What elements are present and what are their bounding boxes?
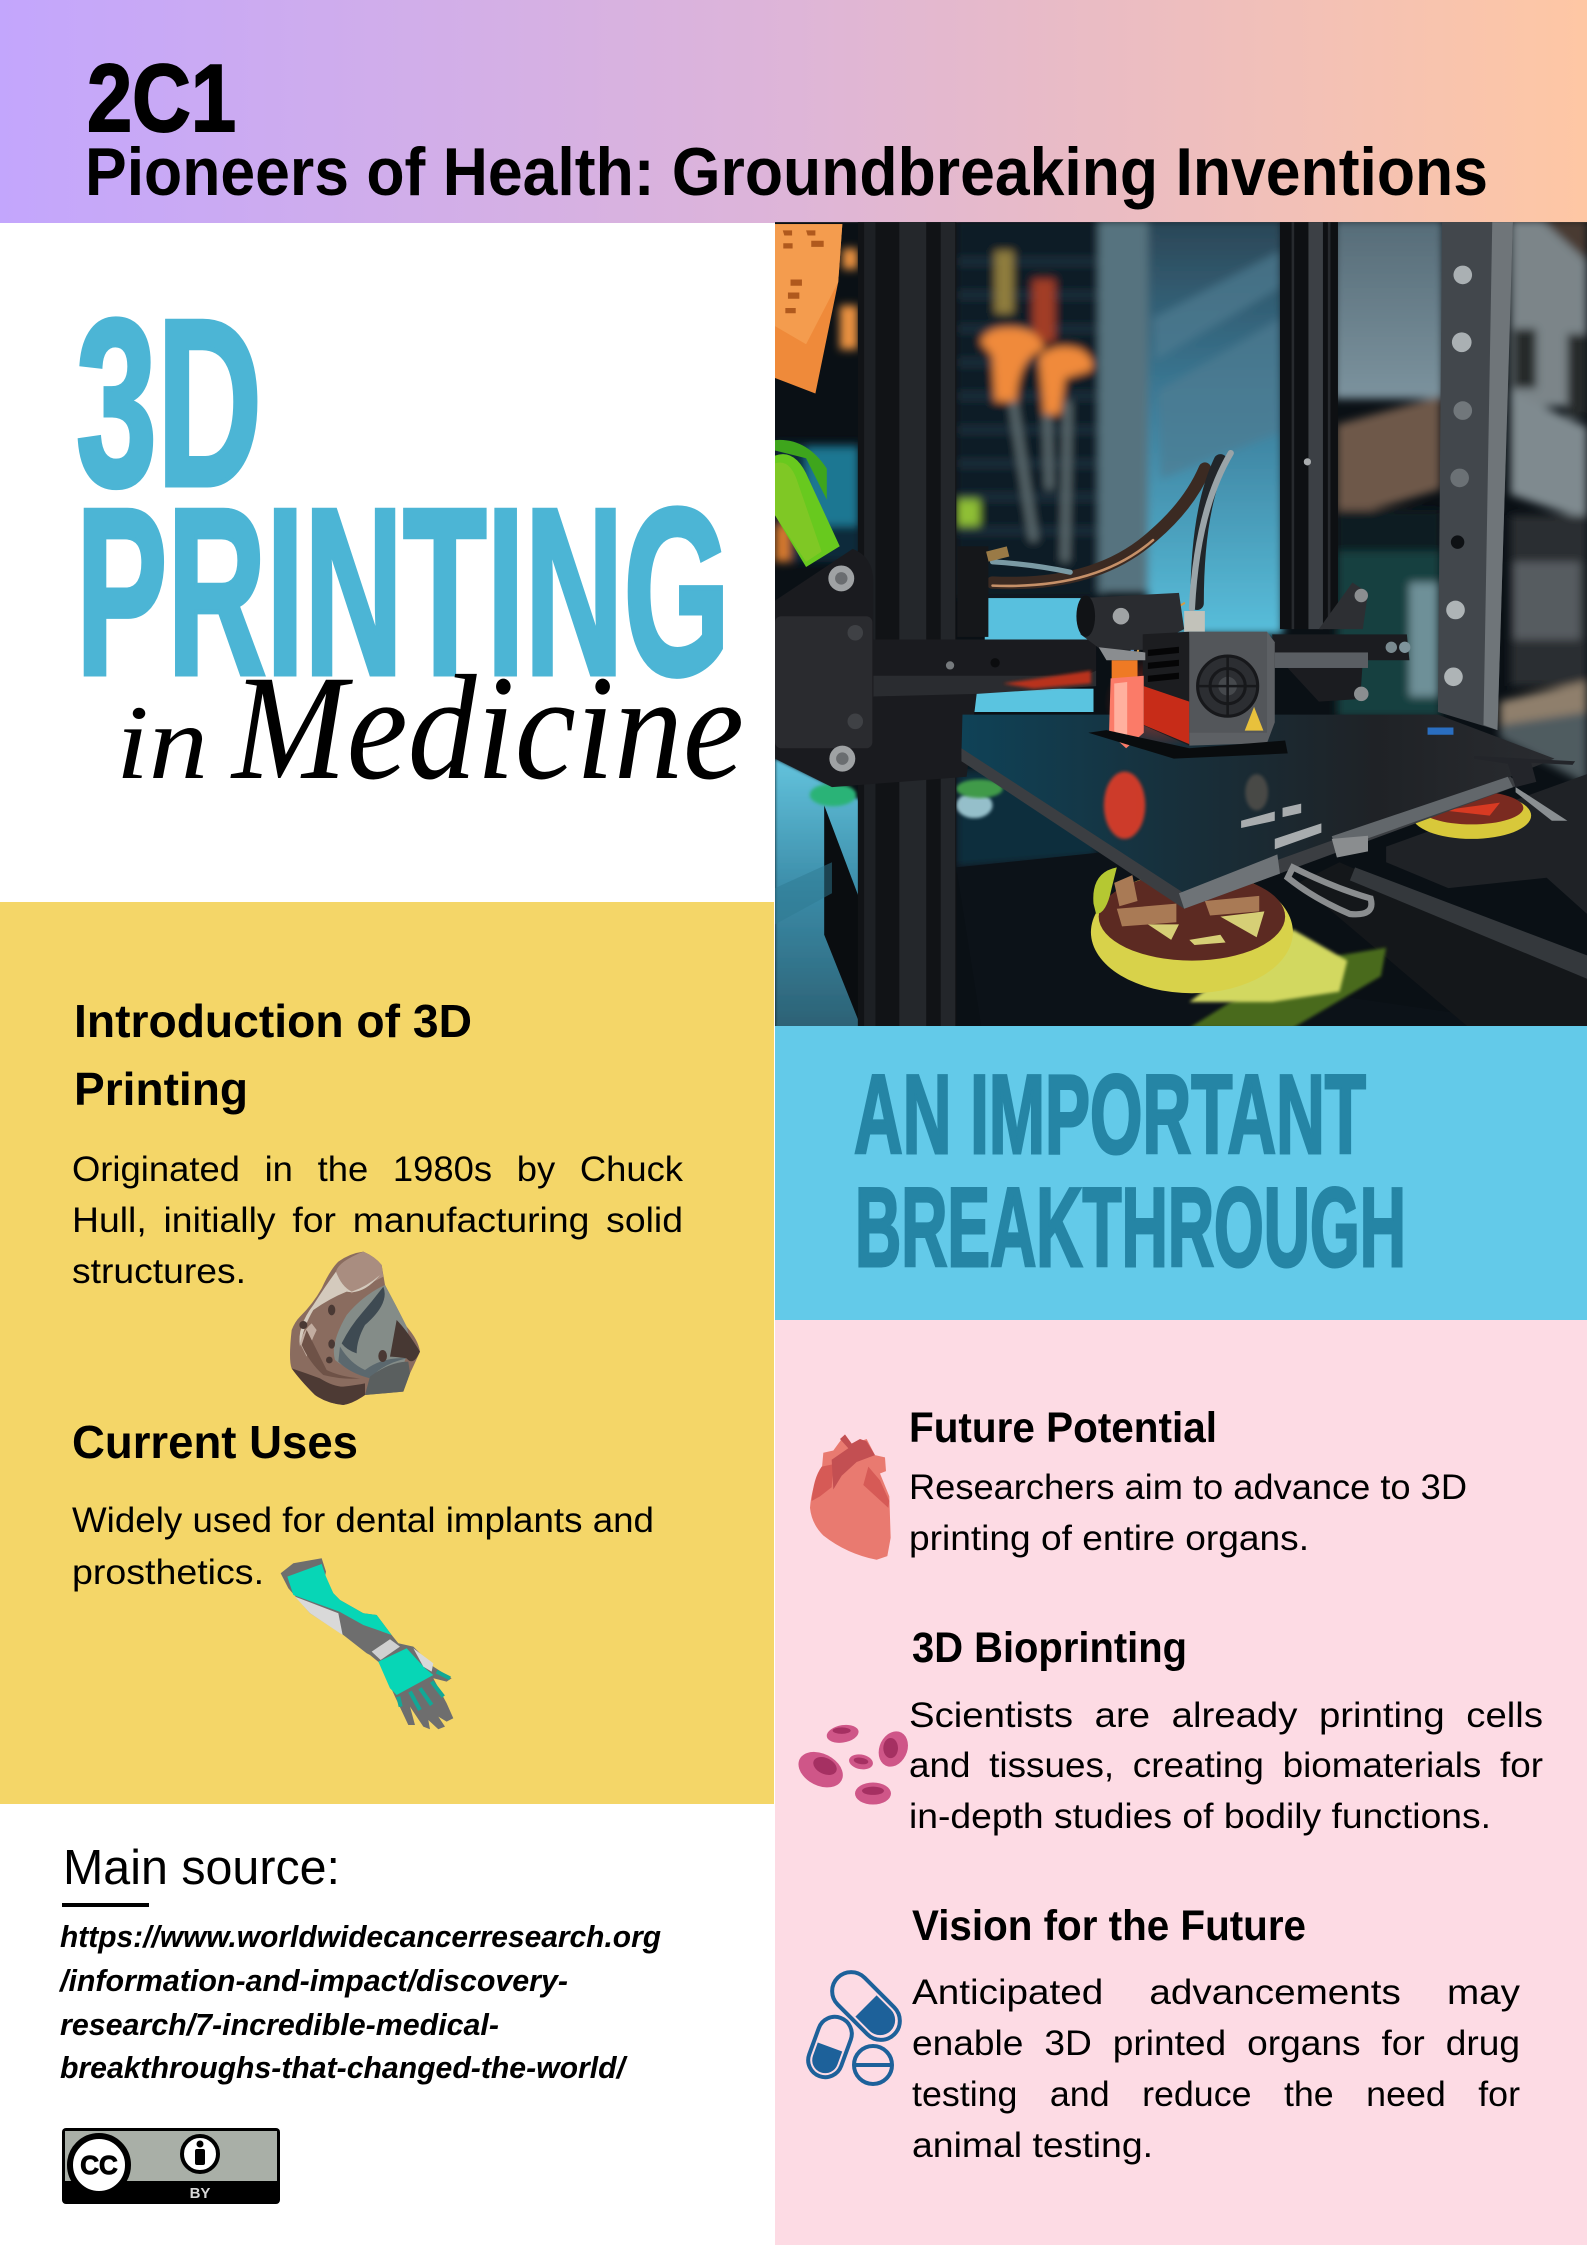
text block: source url bbox=[58, 1919, 661, 2085]
photo: heated print bed bbox=[961, 715, 1575, 914]
panel: future items bbox=[775, 1320, 1587, 2245]
photo: yellow printed spool in front bbox=[1091, 867, 1386, 1028]
text block: 3D bioprinting: in-depth studies of bodily functions. bbox=[909, 1797, 1491, 1836]
title: 3D Printing in Medicine: PRINTING bbox=[76, 460, 730, 725]
title: 3D Printing in Medicine: 3D bbox=[76, 271, 262, 536]
photo: green printed tube bbox=[775, 440, 840, 567]
text block: uses: prosthetics. bbox=[72, 1553, 264, 1592]
heading: main source: Main source: bbox=[63, 1841, 340, 1895]
photo: lower backdrop and floor bbox=[775, 759, 1587, 1032]
photo: vertical aluminium frame bbox=[858, 220, 1338, 1028]
panel: intro and current uses: Printing bbox=[74, 1063, 248, 1115]
text block: source url: https://www.worldwidecancerresearch.org bbox=[60, 1919, 661, 1954]
panel: intro and current uses bbox=[0, 902, 774, 1804]
icon: prosthetic arm bbox=[281, 1558, 453, 1729]
text block: source url: /information-and-impact/discovery- bbox=[58, 1963, 568, 1998]
title: 3D Printing in Medicine bbox=[76, 271, 744, 811]
text block: source url: research/7-incredible-medical- bbox=[60, 2007, 499, 2042]
photo: shelf post bbox=[1438, 220, 1513, 730]
text block: uses bbox=[72, 1501, 654, 1592]
text block: vision for the future: animal testing. bbox=[912, 2126, 1153, 2165]
icon: CC BY badge bbox=[62, 2128, 280, 2204]
header label 2C1: 2C1 bbox=[87, 45, 236, 152]
text block: 3D bioprinting: 3D Bioprinting bbox=[912, 1624, 1187, 1672]
text block: origin: Originated in the 1980s by Chuck bbox=[72, 1150, 684, 1189]
header title: Pioneers of Health: Groundbreaking Inventions bbox=[85, 134, 1488, 210]
text block: 3D bioprinting: Scientists are already printing cells bbox=[909, 1696, 1543, 1735]
text block: origin bbox=[72, 1150, 684, 1291]
icon: rock bbox=[290, 1252, 420, 1405]
heading: current uses: Current Uses bbox=[72, 1416, 358, 1468]
text block: uses: Widely used for dental implants and bbox=[72, 1501, 654, 1540]
icon: heart bbox=[810, 1434, 891, 1560]
heading: introduction of 3D printing: Introduction of 3D bbox=[74, 995, 472, 1047]
title: 3D Printing in Medicine: in bbox=[116, 684, 208, 801]
text block: vision for the future: enable 3D printed organs for drug bbox=[912, 2024, 1520, 2063]
icon: blood cells bbox=[796, 1723, 912, 1805]
text block: origin: structures. bbox=[72, 1252, 246, 1291]
icon: pills bbox=[803, 1964, 908, 2084]
text block: future potential: printing of entire organs. bbox=[909, 1519, 1309, 1558]
text block: origin: Hull, initially for manufacturing solid bbox=[72, 1201, 683, 1240]
text block: vision for the future: Anticipated advancements may bbox=[912, 1973, 1521, 2012]
text block: future potential: Researchers aim to advance to 3D bbox=[909, 1468, 1467, 1507]
text block: future potential: Future Potential bbox=[909, 1404, 1217, 1452]
text block: future potential bbox=[909, 1404, 1467, 1558]
icon: CC BY badge: CC bbox=[80, 2150, 118, 2180]
text block: vision for the future: testing and reduce the need for bbox=[912, 2075, 1520, 2114]
photo: horizontal gantry arm and left bracket bbox=[775, 546, 1410, 787]
photo: yellow spool behind bed bbox=[1412, 791, 1531, 839]
panel: an important breakthrough bbox=[775, 1026, 1587, 1320]
photo: filament cables bbox=[993, 453, 1231, 652]
panel: source block bbox=[0, 1804, 774, 2245]
text block: source url: breakthroughs-that-changed-the-world/ bbox=[60, 2050, 628, 2085]
icon: CC BY badge: BY bbox=[190, 2185, 210, 2202]
text block: vision for the future: Vision for the Future bbox=[912, 1902, 1306, 1950]
text block: 3D bioprinting bbox=[909, 1624, 1543, 1836]
header band bbox=[0, 0, 1587, 223]
text block: 3D bioprinting: and tissues, creating biomaterials for bbox=[909, 1746, 1543, 1785]
photo: print head and fan bbox=[1076, 593, 1288, 759]
panel: 3D printer photo bbox=[775, 220, 1587, 1032]
photo: orange printed part bbox=[775, 224, 842, 393]
title: 3D Printing in Medicine: Medicine bbox=[230, 645, 744, 811]
text block: vision for the future bbox=[912, 1902, 1521, 2165]
